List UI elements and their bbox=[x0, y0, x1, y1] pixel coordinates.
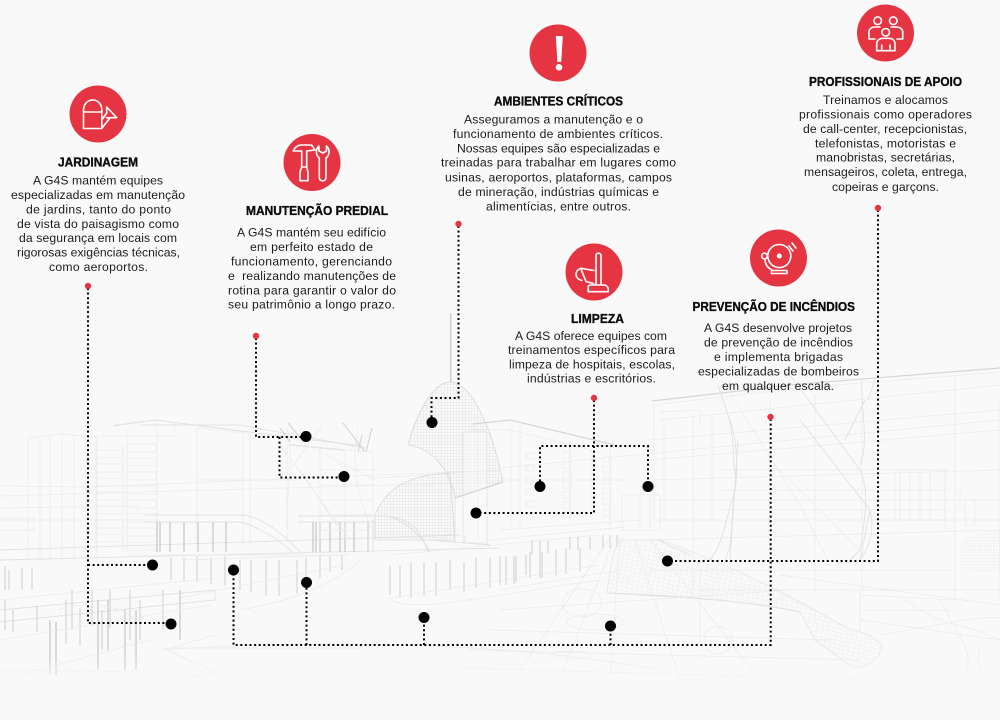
connector: manutencao predial bbox=[253, 333, 350, 482]
text: profissionais de apoio: telefonistas, motoristas e bbox=[815, 136, 956, 150]
text: jardinagem: de jardins, tanto do ponto bbox=[26, 202, 171, 216]
text: prevencao de incendios: A G4S desenvolve projetos bbox=[704, 321, 852, 335]
dome tower bbox=[368, 313, 503, 552]
icon: watering can bbox=[70, 86, 126, 142]
twisted tower bbox=[280, 423, 500, 540]
heading: profissionais de apoio: PROFISSIONAIS DE APOIO bbox=[809, 75, 962, 89]
large glass building bbox=[650, 368, 1000, 640]
front left columns bbox=[0, 566, 660, 690]
text: limpeza: indústrias e escritórios. bbox=[527, 372, 656, 386]
text: prevencao de incendios: e implementa brigadas bbox=[714, 350, 843, 364]
panel: limpeza bbox=[508, 244, 679, 386]
plaza wave and ground mesh bbox=[460, 538, 1000, 680]
text: profissionais de apoio: manobristas, secretárias, bbox=[816, 151, 955, 165]
panel: ambientes criticos bbox=[441, 24, 680, 214]
connector: profissionais de apoio bbox=[662, 205, 881, 567]
text: jardinagem: de vista do paisagismo como bbox=[17, 217, 179, 231]
right far mesh bbox=[960, 530, 1000, 571]
text: ambientes criticos: de mineração, indústrias químicas e bbox=[458, 185, 659, 199]
text: jardinagem: como aeroportos. bbox=[49, 260, 148, 274]
icon: mop and bucket bbox=[566, 244, 622, 300]
panel: manutencao predial bbox=[228, 134, 400, 312]
text: profissionais de apoio: copeiras e garçons. bbox=[832, 180, 939, 194]
text: ambientes criticos: usinas, aeroportos, plataformas, campos bbox=[445, 170, 672, 184]
text: manutencao predial: em perfeito estado de bbox=[250, 240, 373, 254]
text: ambientes criticos: alimentícias, entre outros. bbox=[486, 200, 631, 214]
panel: prevencao de incendios bbox=[692, 230, 863, 393]
text: ambientes criticos: Nossas equipes são especializadas e bbox=[457, 142, 660, 156]
centre right building bbox=[470, 420, 1000, 585]
icon: group of people bbox=[857, 4, 914, 62]
text: ambientes criticos: funcionamento de ambientes críticos. bbox=[453, 127, 663, 141]
text: limpeza: A G4S oferece equipes com bbox=[515, 329, 667, 343]
text: prevencao de incendios: de prevenção de incêndios bbox=[704, 336, 853, 350]
text: jardinagem: rigorosas exigências técnicas, bbox=[17, 246, 180, 260]
wireframe city illustration bbox=[0, 313, 1000, 720]
text: jardinagem: especializadas em manutenção bbox=[11, 188, 185, 202]
text: profissionais de apoio: mensageiros, coleta, entrega, bbox=[804, 165, 967, 179]
heading: prevencao de incendios: PREVENÇÃO DE INCÊNDIOS bbox=[692, 299, 855, 314]
connector: prevencao de incendios bbox=[228, 414, 774, 645]
heading: jardinagem: JARDINAGEM bbox=[58, 156, 138, 170]
text: limpeza: limpeza de hospitais, escolas, bbox=[509, 357, 675, 371]
icon: fire alarm bell bbox=[750, 230, 807, 286]
panel: profissionais de apoio bbox=[799, 4, 976, 194]
heading: manutencao predial: MANUTENÇÃO PREDIAL bbox=[246, 203, 388, 218]
text: ambientes criticos: Asseguramos a manutenção e o bbox=[464, 112, 643, 126]
text: prevencao de incendios: em qualquer escala. bbox=[722, 379, 834, 393]
heading: ambientes criticos: AMBIENTES CRÍTICOS bbox=[494, 94, 623, 109]
text: prevencao de incendios: especializadas de bombeiros bbox=[698, 365, 859, 379]
connector: ambientes criticos bbox=[426, 221, 462, 428]
text: manutencao predial: A G4S mantém seu edifício bbox=[237, 226, 386, 240]
icon: hammer and wrench bbox=[284, 134, 340, 191]
text: manutencao predial: rotina para garantir o valor do bbox=[228, 283, 396, 297]
text: ambientes criticos: treinadas para trabalhar em lugares como bbox=[441, 156, 676, 170]
text: jardinagem: A G4S mantém equipes bbox=[33, 173, 163, 187]
text: limpeza: treinamentos específicos para bbox=[508, 343, 675, 357]
text: jardinagem: da segurança em locais com bbox=[19, 231, 177, 245]
text: manutencao predial: funcionamento, gerenciando bbox=[231, 255, 392, 269]
panel: jardinagem bbox=[11, 86, 189, 274]
heading: limpeza: LIMPEZA bbox=[571, 312, 624, 326]
icon: exclamation mark bbox=[530, 24, 586, 82]
text: profissionais de apoio: de call-center, recepcionistas, bbox=[803, 122, 967, 136]
text: profissionais de apoio: Treinamos e alocamos bbox=[823, 93, 948, 107]
text: profissionais de apoio: profissionais como operadores bbox=[799, 108, 972, 122]
text: manutencao predial: e realizando manutenções de bbox=[228, 269, 396, 283]
columned platforms bbox=[130, 515, 600, 610]
bottom fade bbox=[0, 655, 1000, 690]
connector: jardinagem bbox=[85, 283, 176, 630]
connector: limpeza bbox=[470, 395, 654, 518]
left buildings bbox=[0, 420, 500, 622]
text: manutencao predial: seu patrimônio a longo prazo. bbox=[228, 298, 395, 312]
